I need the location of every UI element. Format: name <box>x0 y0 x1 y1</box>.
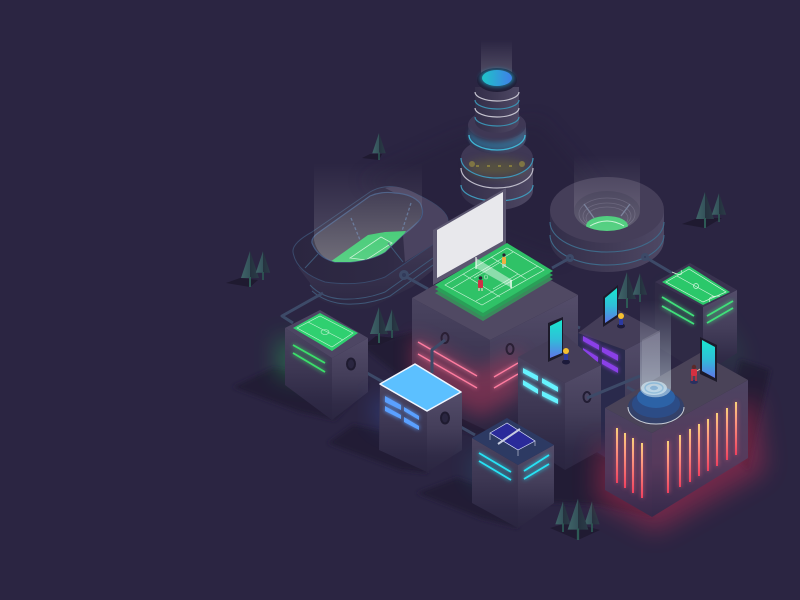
cyan windows block <box>518 317 601 470</box>
person: red <box>690 365 700 384</box>
purple windows block <box>578 285 660 470</box>
oval stadium: bowl <box>312 192 423 262</box>
pitch <box>293 313 358 351</box>
connector pipes <box>282 254 672 435</box>
trees: right <box>682 192 726 228</box>
trees: bottom <box>550 499 600 540</box>
blue block <box>375 340 462 472</box>
cyan lights <box>479 453 549 480</box>
trees: behind purple block <box>618 272 647 308</box>
red glow <box>596 395 765 532</box>
ground shadows <box>233 330 770 528</box>
red block <box>596 300 765 532</box>
tower cast shadow <box>360 120 600 260</box>
tree: top <box>362 133 386 160</box>
tennis net <box>476 258 512 288</box>
oval stadium: light beam <box>314 163 422 262</box>
tower: top beam <box>481 40 512 78</box>
pink lights <box>418 342 518 388</box>
pipe to red block <box>587 376 640 398</box>
table tennis table <box>490 423 535 456</box>
oval stadium: top ring <box>293 187 448 284</box>
tower: top tier <box>475 87 519 133</box>
trees: behind main block <box>365 307 399 345</box>
basketball court <box>662 266 730 305</box>
green glow <box>278 335 326 380</box>
oval stadium: far wall <box>385 187 448 262</box>
round stadium: body <box>550 210 664 272</box>
oval stadium: body <box>298 225 448 309</box>
purple windows <box>583 336 618 373</box>
phone screen 2 <box>603 285 618 327</box>
red light bars <box>616 402 737 498</box>
person: yellow 1 <box>562 348 570 364</box>
pipe sockets <box>442 333 514 354</box>
pipe socket <box>441 412 449 424</box>
oval stadium: pitch <box>330 231 406 262</box>
blue windows <box>385 396 419 430</box>
round stadium: top ring <box>550 177 664 243</box>
tower: bottom tier <box>461 138 533 210</box>
round stadium <box>550 170 664 272</box>
tennis court <box>435 243 553 321</box>
trees: left <box>226 251 270 287</box>
phone screen 3 <box>700 337 717 382</box>
tower: glowing top <box>477 68 517 92</box>
hologram light beam <box>640 300 671 397</box>
green lights <box>293 345 325 372</box>
red glow <box>412 335 520 418</box>
table tennis block <box>472 418 554 528</box>
right basketball block <box>655 263 745 375</box>
person: yellow 2 <box>617 313 625 328</box>
round stadium: bowl <box>574 191 640 231</box>
hologram base <box>628 381 684 424</box>
vertical pipe <box>432 340 445 373</box>
player: red <box>478 275 488 291</box>
illustration: isometric stadium city <box>226 48 776 541</box>
cyan windows <box>523 368 558 404</box>
pipe socket <box>584 392 590 402</box>
blue pool top <box>380 364 461 411</box>
phone screen 1 <box>548 317 563 362</box>
red lights halo <box>616 402 738 498</box>
tower stadium <box>461 40 533 210</box>
oval stadium <box>292 182 448 305</box>
round stadium: light beam <box>574 155 640 231</box>
pipe socket <box>347 358 355 370</box>
main tennis block <box>412 188 578 432</box>
screen <box>433 188 506 285</box>
translucent panel <box>642 330 660 390</box>
green lights <box>662 297 733 324</box>
tower: middle tier <box>468 110 526 154</box>
player: yellow <box>502 253 506 268</box>
block: left football <box>278 310 368 420</box>
